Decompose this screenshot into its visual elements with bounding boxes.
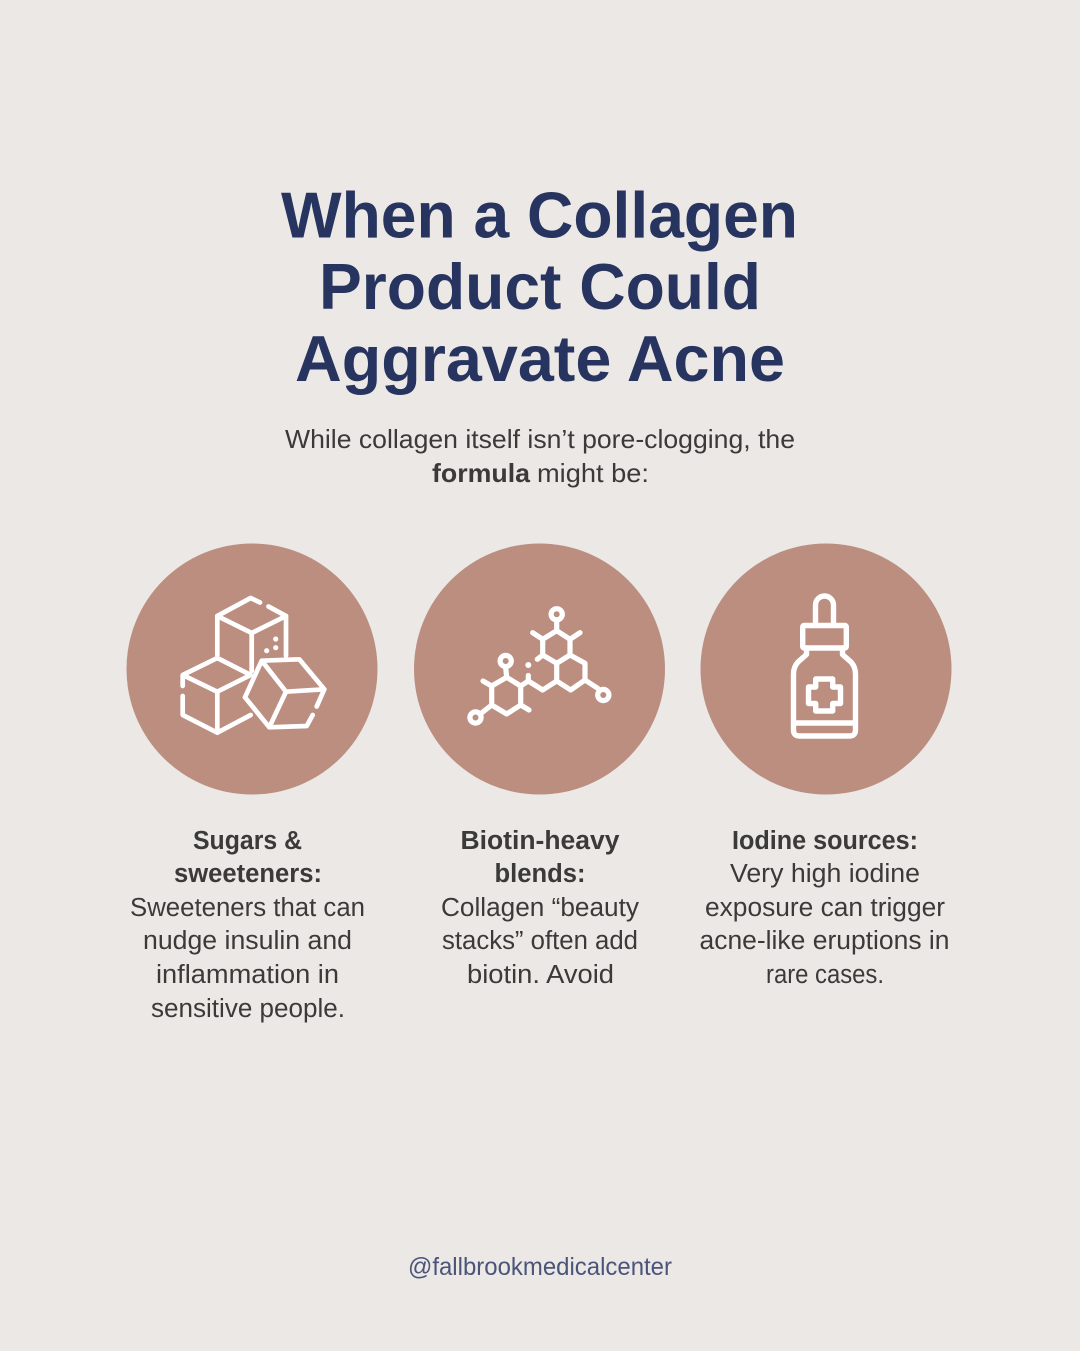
subtitle [285,424,795,488]
icon: sugar cubes [126,544,378,794]
title: Product Could [319,250,761,323]
title: When a Collagen [281,178,798,252]
subtitle: While collagen itself isn’t pore-clogging, the [285,424,795,454]
icon: molecule [414,544,665,794]
title [281,178,798,395]
text: biotin-heavy blends: biotin. Avoid [467,961,614,989]
text: iodine sources: Very high iodine [730,860,920,888]
text: sugars and sweeteners: sensitive people. [151,995,345,1023]
footer handle: @fallbrookmedicalcenter [408,1253,672,1281]
text: biotin-heavy blends: blends: [494,860,586,888]
subtitle: formula [432,458,531,488]
text: biotin-heavy blends [441,827,639,989]
text: sugars and sweeteners: sweeteners: [174,860,322,888]
text: sugars and sweeteners: Sugars & [193,827,302,855]
text: iodine sources: Iodine sources: [732,827,918,855]
text: sugars and sweeteners: Sweeteners that can [130,894,365,922]
title: Aggravate Acne [295,322,785,395]
panel: iodine sources [700,544,952,989]
text: iodine sources [700,827,950,989]
text: sugars and sweeteners: nudge insulin and [143,927,352,955]
text: biotin-heavy blends: Collagen “beauty [441,894,639,922]
subtitle: might be: [537,458,649,488]
text: biotin-heavy blends: stacks” often add [442,927,638,955]
text: sugars and sweeteners: inflammation in [156,961,339,989]
text: sugars and sweeteners [130,827,365,1023]
text: iodine sources: rare cases. [766,961,884,989]
text: biotin-heavy blends: Biotin-heavy [460,827,620,855]
panel: biotin-heavy blends [414,544,665,989]
icon: dropper bottle [700,544,952,794]
text: iodine sources: acne-like eruptions in [700,927,950,955]
panel: sugars and sweeteners [126,544,378,1023]
text: iodine sources: exposure can trigger [705,894,946,922]
